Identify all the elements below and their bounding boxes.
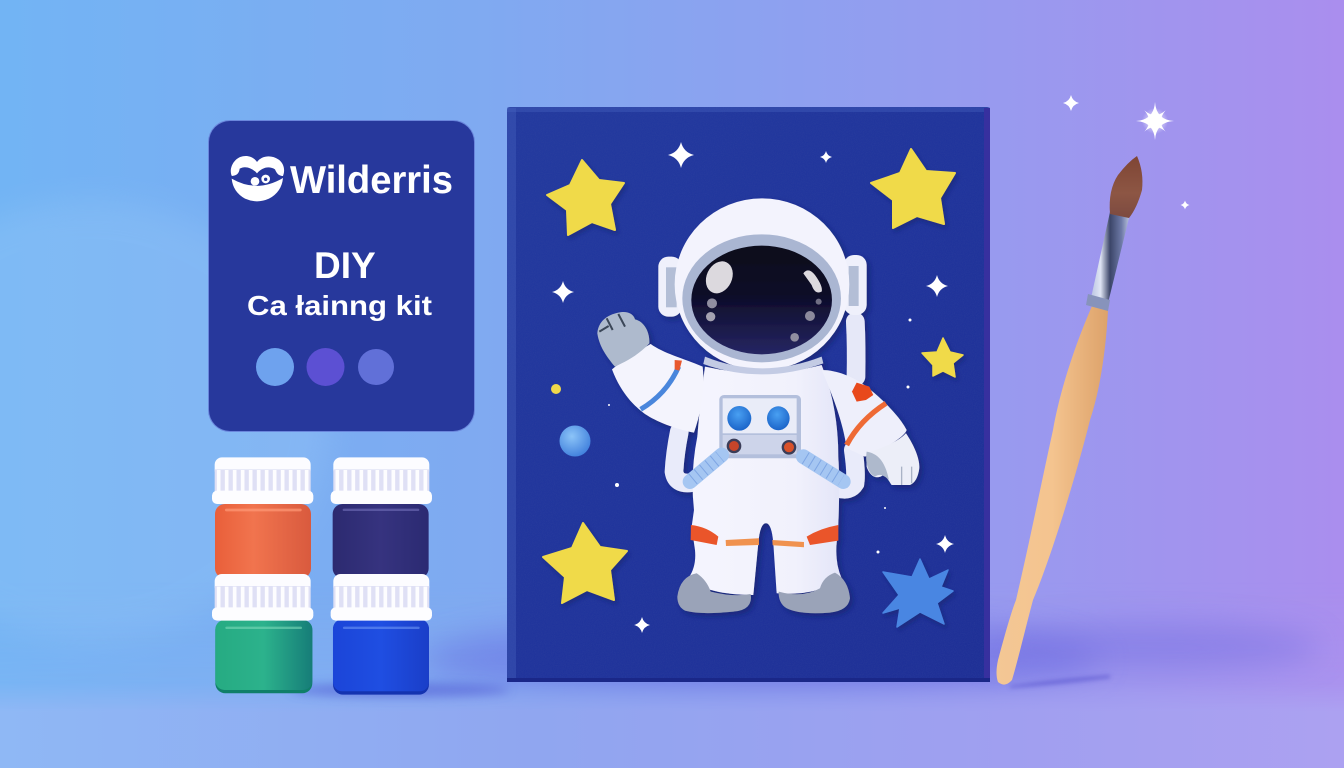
right glove [867,433,919,485]
jar: purple [331,457,432,578]
paint jars [212,457,510,697]
chest panel [719,395,801,458]
planet sphere [560,426,590,456]
astronaut [597,198,919,613]
colour dots [256,348,394,386]
knee bands [691,525,838,547]
visor reflections [701,257,822,342]
straps [690,455,843,482]
heading: DIY: DIY [314,245,376,286]
suit: torso and legs [688,365,842,595]
hoses [674,322,856,489]
yellow dot [551,384,561,394]
boots [677,573,850,613]
brush handle [996,306,1108,685]
brand name: Wilderris [290,159,453,202]
jar: green [212,574,313,693]
sparkles in background [1063,95,1190,210]
left raised arm [612,344,703,433]
star: top left [547,160,624,235]
panel: brand card [208,120,475,432]
subheading: Ca łainng kit [247,290,432,321]
jar: royal blue [331,574,432,695]
sparkles on canvas [552,142,954,633]
helmet [675,198,849,370]
star: top right [871,149,955,228]
right arm [822,370,907,457]
raised fist [597,312,649,367]
visor [691,246,832,354]
panel: canvas [507,107,990,682]
brush ferrule [1091,212,1129,303]
star: small right [922,338,963,377]
jar: orange [212,457,313,578]
visor rim [682,234,841,362]
star: bottom left [543,523,627,603]
brush bristles [1110,156,1142,218]
ear pieces [658,257,682,317]
icon: heart logo [231,156,284,201]
star: blue [883,559,953,627]
paintbrush [996,156,1142,688]
